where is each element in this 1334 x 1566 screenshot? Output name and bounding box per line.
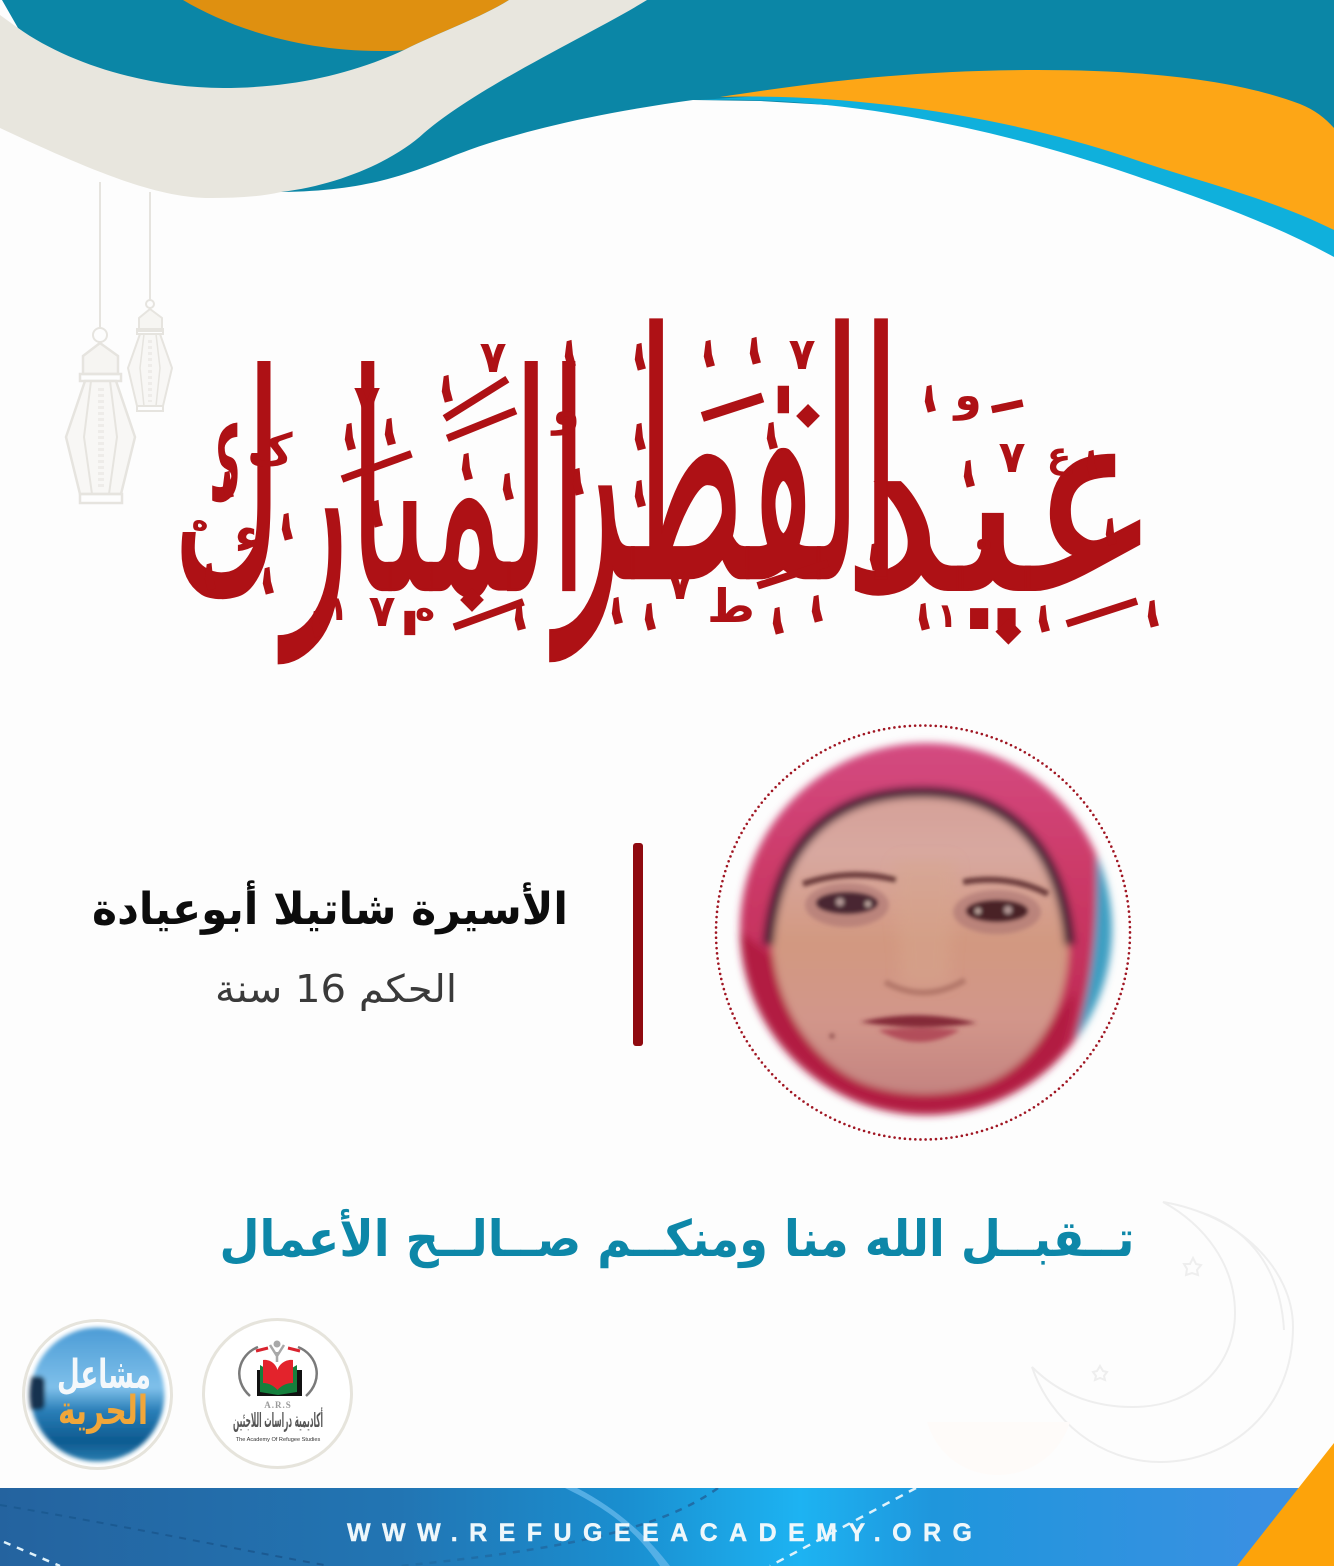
- title ornamental marks: ١: [937, 596, 957, 636]
- title ornamental marks: ،: [899, 559, 940, 651]
- title ornamental marks: ـ: [980, 353, 1028, 428]
- title ornamental marks: ـ: [323, 405, 421, 497]
- title ornamental marks: ،: [352, 456, 393, 548]
- title ornamental marks: ،: [365, 374, 406, 466]
- title ornamental marks: و: [550, 385, 580, 436]
- title ornamental marks: ،: [185, 519, 226, 611]
- title ornamental marks: ع: [1047, 435, 1073, 476]
- faint pink half circle: [927, 1422, 1070, 1475]
- cream wave: [0, 0, 647, 198]
- title ornamental marks: ـ: [416, 334, 520, 435]
- title ornamental marks: ء: [234, 506, 260, 564]
- small lantern: [128, 192, 172, 411]
- English academy name: The Academy Of Refugee Studies: [236, 1437, 320, 1443]
- title ornamental marks: ■: [792, 399, 825, 432]
- title ornamental marks: ،: [753, 563, 794, 655]
- title word: Eid: عيد: [842, 349, 1162, 652]
- title ornamental marks: ،: [730, 293, 771, 385]
- title ornamental marks: و: [952, 370, 982, 421]
- vertical divider: [633, 843, 643, 1046]
- title ornamental marks: ٧: [999, 432, 1026, 483]
- title ornamental marks: ،: [747, 378, 788, 470]
- facial features: [803, 860, 1048, 1042]
- title word: al-Fitr: الفطر: [549, 262, 900, 663]
- title ornamental marks: ه: [192, 504, 208, 537]
- title word: al-Mubarak: المبارك: [173, 312, 587, 663]
- title ornamental marks: ،: [615, 379, 656, 471]
- teal wave: [2, 0, 1334, 192]
- title ornamental marks: ■: [456, 583, 489, 616]
- title ornamental marks: ـ: [1049, 551, 1146, 642]
- title ornamental marks: ،: [1019, 561, 1060, 653]
- orange wave: [720, 70, 1334, 230]
- orange corner triangle: [1237, 1443, 1334, 1566]
- title ornamental marks: ط: [707, 579, 755, 633]
- logo text orange: الحرية: [58, 1388, 148, 1434]
- logo: Mashaal al-Hurriya: [24, 1320, 172, 1468]
- portrait with dotted ring: [716, 726, 1140, 1140]
- title ornamental marks: ،: [615, 299, 656, 391]
- website address: WWW.REFUGEEACADEMY.ORG: [347, 1519, 972, 1547]
- logo text white: مشاعل: [57, 1352, 151, 1398]
- title ornamental marks: ٧: [354, 376, 381, 427]
- title ornamental marks: ـ: [435, 553, 533, 645]
- top wave banner: [0, 0, 1334, 257]
- title ornamental marks: ،: [262, 469, 303, 561]
- large lantern: [66, 182, 135, 503]
- title ornamental marks: ،: [856, 379, 897, 471]
- star: [1184, 1258, 1201, 1275]
- title ornamental marks: ـ: [681, 331, 772, 440]
- title ornamental marks: ،: [243, 523, 284, 615]
- logo: Academy of Refugee Studies: [204, 1320, 352, 1468]
- title ornamental marks: ،: [1086, 474, 1127, 566]
- dotted ring: [716, 726, 1130, 1140]
- hanging lanterns: [66, 182, 172, 503]
- title ornamental marks: ـ: [740, 513, 837, 604]
- title ornamental marks: ،: [615, 436, 656, 528]
- title ornamental marks: [185, 293, 1169, 658]
- title ornamental marks: ه: [976, 523, 992, 556]
- title ornamental marks: ،: [850, 499, 891, 591]
- title ornamental marks: ،: [422, 331, 463, 423]
- title ornamental marks: ٧: [667, 559, 694, 610]
- title ornamental marks: ،: [545, 296, 586, 388]
- title ornamental marks: ،: [592, 553, 633, 645]
- open book: [257, 1360, 302, 1396]
- title ornamental marks: ،: [905, 341, 946, 433]
- A.R.S label: A.R.S: [264, 1400, 292, 1410]
- title ornamental marks: ٧: [789, 329, 816, 380]
- title ornamental marks: ،: [292, 566, 333, 658]
- figure: [274, 1340, 280, 1348]
- prisoner name: الأسيرة شاتيلا أبوعيادة: [92, 880, 568, 935]
- title ornamental marks: ،: [325, 379, 366, 471]
- title ornamental marks: ،: [1067, 406, 1108, 498]
- text: أكاديمية دراسات اللاجئين: [233, 1406, 323, 1432]
- title ornamental marks: ٧: [369, 586, 396, 637]
- title ornamental marks: ،: [495, 559, 536, 651]
- footer band: [0, 1488, 1334, 1566]
- blurred photo: [730, 735, 1140, 1125]
- dark orange wave: [183, 0, 509, 51]
- greeting line: تــقبــل الله منا ومنكــم صــالــح الأعمال: [220, 1208, 1134, 1269]
- title ornamental marks: ،: [684, 296, 725, 388]
- title ornamental marks: ،: [792, 551, 833, 643]
- title ornamental marks: ه: [415, 589, 435, 629]
- title ornamental marks: ،: [625, 559, 666, 651]
- title ornamental marks: ،: [944, 416, 985, 508]
- title ornamental marks: ک: [247, 425, 293, 476]
- title ornamental marks: ،: [1128, 556, 1169, 648]
- title ornamental marks: ١: [328, 589, 348, 629]
- sentence line: الحكم 16 سنة: [215, 967, 457, 1011]
- title ornamental marks: ،: [553, 424, 594, 516]
- title ornamental marks: ■: [992, 612, 1028, 648]
- title calligraphy: Eid al-Fitr al-Mubarak: [173, 262, 1169, 663]
- faint crescent and stars: [1032, 1202, 1293, 1462]
- title ornamental marks: ـ: [427, 362, 526, 456]
- wreath: [239, 1347, 317, 1396]
- title ornamental marks: ٧: [480, 332, 507, 383]
- sky blue wave: [700, 80, 1334, 257]
- star: [1093, 1366, 1107, 1380]
- title ornamental marks: ،: [203, 427, 244, 519]
- title ornamental marks: ،: [442, 409, 483, 501]
- title ornamental marks: ،: [483, 429, 524, 521]
